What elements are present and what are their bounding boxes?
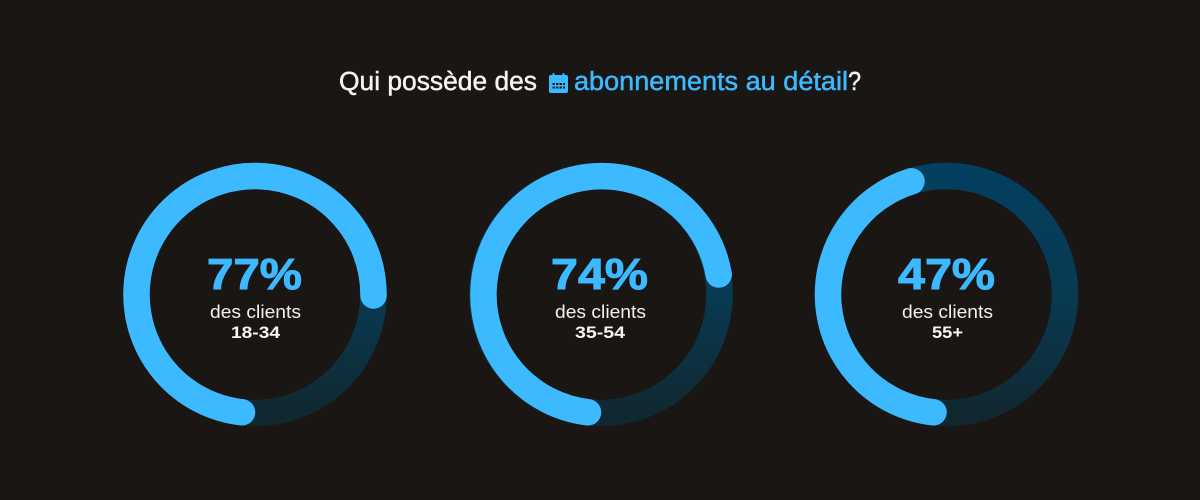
- panel: donut 55+: [828, 176, 1065, 413]
- ring value 74%: [483, 176, 719, 412]
- label 18-34: 18-34: [231, 324, 281, 342]
- title: ?: [848, 68, 861, 96]
- ring value 77%: [137, 176, 374, 412]
- value 77%: 77%: [207, 250, 302, 299]
- label des clients: des clients: [555, 302, 646, 322]
- panel: donut 18-34: [136, 176, 374, 413]
- icon: calendar: [549, 73, 568, 93]
- value 74%: 74%: [551, 250, 648, 299]
- ring track 55+: [828, 176, 1065, 413]
- title: Qui possède des: [339, 68, 537, 96]
- label 55+: 55+: [932, 324, 963, 342]
- ring track 35-54: [482, 176, 720, 413]
- title: [339, 68, 861, 96]
- panel: donut 35-54: [482, 176, 720, 413]
- ring value 47%: [828, 181, 934, 412]
- label 35-54: 35-54: [575, 324, 626, 342]
- value 47%: 47%: [898, 250, 995, 299]
- title: abonnements au détail: [574, 68, 848, 96]
- ring track 18-34: [136, 176, 374, 413]
- label des clients: des clients: [210, 302, 301, 322]
- label des clients: des clients: [902, 302, 993, 322]
